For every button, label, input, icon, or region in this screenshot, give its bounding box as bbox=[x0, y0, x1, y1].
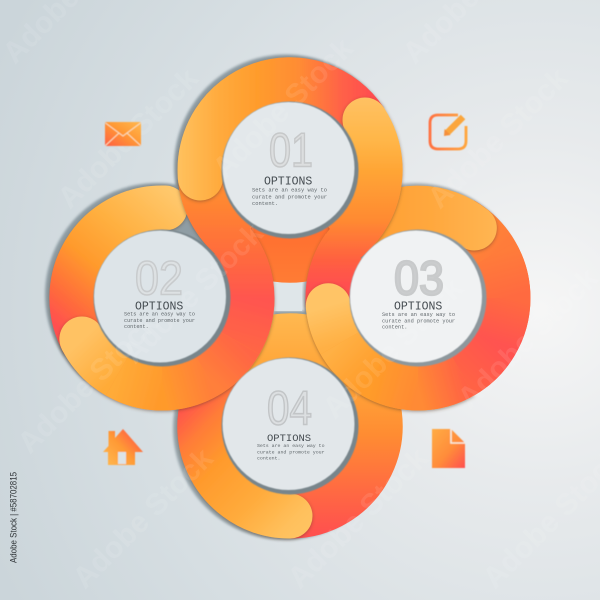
watermark: Adobe Stock bbox=[207, 32, 360, 185]
ring 1 top band with rounded end bbox=[178, 80, 365, 200]
option 2 text: 02 bbox=[135, 252, 183, 306]
option 3 text: Sets are an easy way to bbox=[382, 312, 455, 318]
icon: note and pencil bbox=[430, 115, 466, 149]
ring 2 upper band with rounded end bbox=[72, 186, 188, 343]
option 1 text: Sets are an easy way to bbox=[252, 186, 327, 194]
watermark: Adobe Stock bbox=[67, 442, 220, 595]
option 4 text bbox=[257, 382, 325, 462]
option 2 text: Sets are an easy way to bbox=[124, 312, 195, 318]
ring shadows bbox=[45, 54, 527, 540]
option 1 text: OPTIONS bbox=[264, 176, 312, 188]
central gap bbox=[274, 283, 302, 311]
option 4 text: 04 bbox=[267, 382, 312, 436]
disc 2 bbox=[94, 230, 230, 366]
watermark: Adobe Stock bbox=[117, 217, 270, 370]
icon: document bbox=[432, 429, 465, 468]
disc 4 bbox=[222, 358, 358, 494]
icon: envelope bbox=[105, 122, 141, 146]
option 3 text: curate and promote your bbox=[382, 318, 455, 324]
option 2 text bbox=[124, 252, 195, 330]
option 1 text: content. bbox=[252, 200, 278, 207]
ring 3 bottom band with rounded end bbox=[306, 283, 463, 388]
ring 4 left band with rounded end bbox=[200, 368, 312, 538]
option 4 text: OPTIONS bbox=[267, 433, 311, 445]
icon: house bbox=[103, 429, 143, 465]
disc 1 bbox=[222, 102, 358, 238]
option 4 text: Sets are an easy way to bbox=[257, 443, 325, 449]
option 4 text: content. bbox=[257, 456, 280, 462]
option 3 text: content. bbox=[382, 324, 407, 330]
ring 2 lower band joining ring 1 bbox=[59, 178, 273, 388]
stock id: Adobe Stock | #58702815 bbox=[8, 472, 18, 563]
ring 3 right band repaint bbox=[463, 343, 496, 376]
ring 1 right band joining ring 3 bbox=[307, 98, 401, 306]
option 2 text: content. bbox=[124, 324, 149, 330]
ring 1 bottom segment bbox=[221, 228, 359, 260]
ring 4 top segment bbox=[221, 336, 359, 368]
option 1 text: 01 bbox=[269, 124, 313, 178]
watermark: Adobe Stock bbox=[422, 62, 575, 215]
ring 3 right band bbox=[463, 220, 508, 376]
watermark: Adobe Stock bbox=[282, 442, 435, 595]
ring 3 top band with rounded end bbox=[360, 206, 497, 250]
option 4 text: curate and promote your bbox=[257, 450, 325, 456]
option 3 text: OPTIONS bbox=[394, 300, 442, 314]
option 2 text: curate and promote your bbox=[124, 318, 195, 324]
option 1 text bbox=[252, 124, 327, 207]
watermark: Adobe Stock bbox=[12, 307, 165, 460]
option 3 text: 03 bbox=[394, 252, 444, 306]
watermark: Adobe Stock bbox=[317, 272, 470, 425]
ring 4 right band bbox=[288, 368, 380, 516]
option 3 text bbox=[382, 252, 455, 330]
disc 3 bbox=[350, 230, 486, 366]
watermark: Adobe Stock bbox=[52, 62, 205, 215]
option 2 text: OPTIONS bbox=[135, 300, 183, 314]
option 1 text: curate and promote your bbox=[252, 194, 327, 200]
